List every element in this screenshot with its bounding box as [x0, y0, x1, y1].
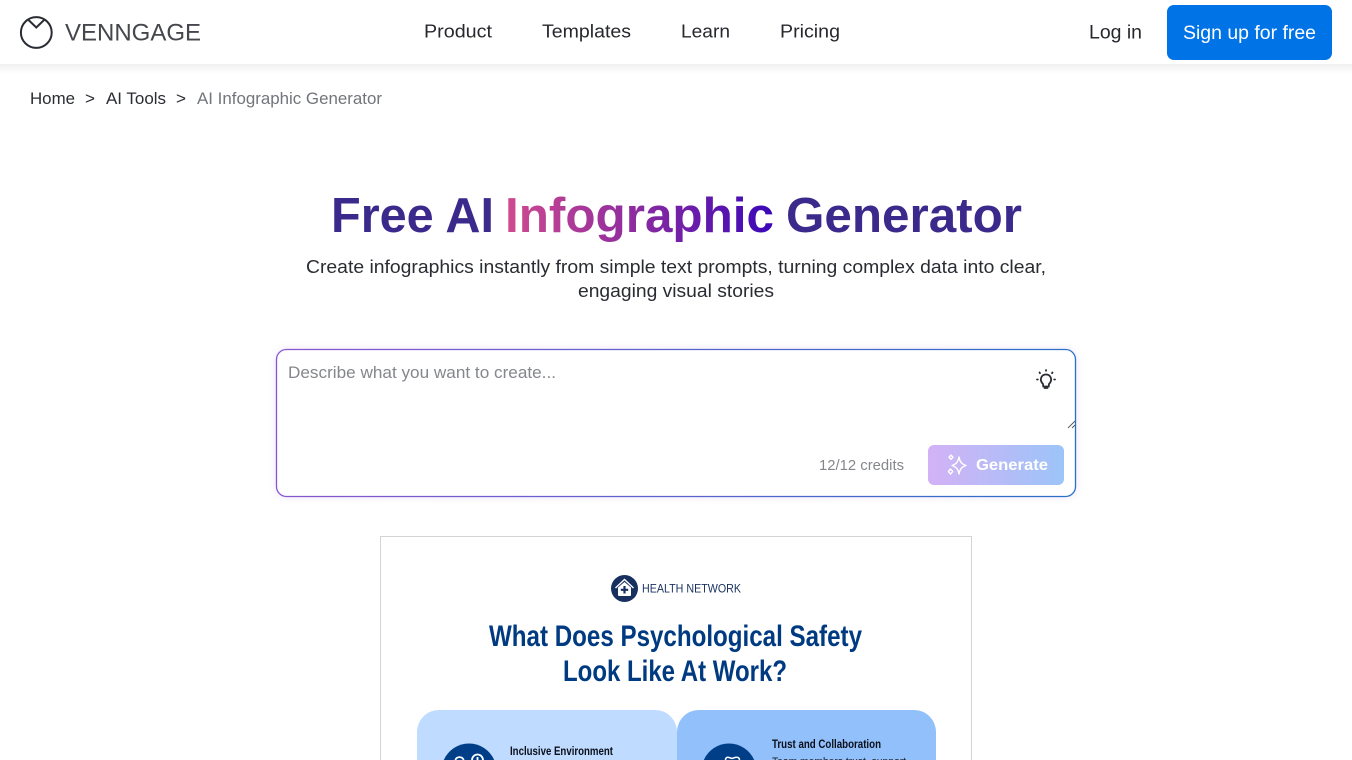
icon: inclusive environment [444, 744, 494, 760]
breadcrumb: AI Infographic Generator [197, 90, 383, 108]
button: Sign up for free [1167, 5, 1332, 60]
card: Trust and Collaboration [677, 710, 936, 760]
logo: Venngage [21, 17, 201, 48]
logo: Health Network [611, 575, 741, 602]
icon: trust [704, 744, 754, 760]
breadcrumb: > [85, 90, 95, 108]
icon: sparkles [948, 455, 966, 474]
breadcrumb: Home [30, 90, 75, 108]
subtitle [306, 257, 1046, 301]
breadcrumb: > [176, 90, 186, 108]
logo: Health Network: HEALTH NETWORK [642, 582, 741, 596]
prompt input box [276, 350, 1076, 496]
breadcrumb [30, 90, 383, 108]
subtitle: Create infographics instantly from simple text prompts, turning complex data into clear, [306, 257, 1046, 277]
button: Sign up for free: Sign up for free [1183, 23, 1316, 44]
panel: example infographic [380, 536, 972, 760]
title: Free AI [331, 189, 494, 243]
icon: light bulb [1037, 370, 1055, 388]
infographic heading: Look Like At Work? [563, 655, 787, 688]
card: Inclusive Environment [417, 710, 677, 760]
nav link: Pricing: Pricing [780, 22, 840, 42]
button: Generate [928, 445, 1064, 485]
credits counter: 12/12 credits [819, 458, 904, 474]
breadcrumb: AI Tools [106, 90, 166, 108]
infographic heading [489, 620, 862, 688]
resize handle [1068, 421, 1075, 428]
card heading: Trust and Collaboration [772, 739, 881, 751]
infographic heading: What Does Psychological Safety [489, 620, 862, 653]
title: Generator [786, 189, 1022, 243]
card heading: Inclusive Environment [510, 746, 613, 758]
title: Infographic [505, 189, 774, 243]
nav link: Product: Product [424, 22, 492, 42]
nav link: Log in: Log in [1089, 22, 1142, 44]
nav link: Templates: Templates [542, 22, 631, 42]
logo: Venngage: VENNGAGE [65, 20, 201, 46]
navigation bar [0, 0, 1352, 74]
title [331, 189, 1022, 243]
button: Generate: Generate [976, 457, 1048, 474]
subtitle: engaging visual stories [578, 281, 774, 301]
nav link: Learn: Learn [681, 22, 730, 42]
placeholder text: Describe what you want to create... [288, 364, 556, 382]
